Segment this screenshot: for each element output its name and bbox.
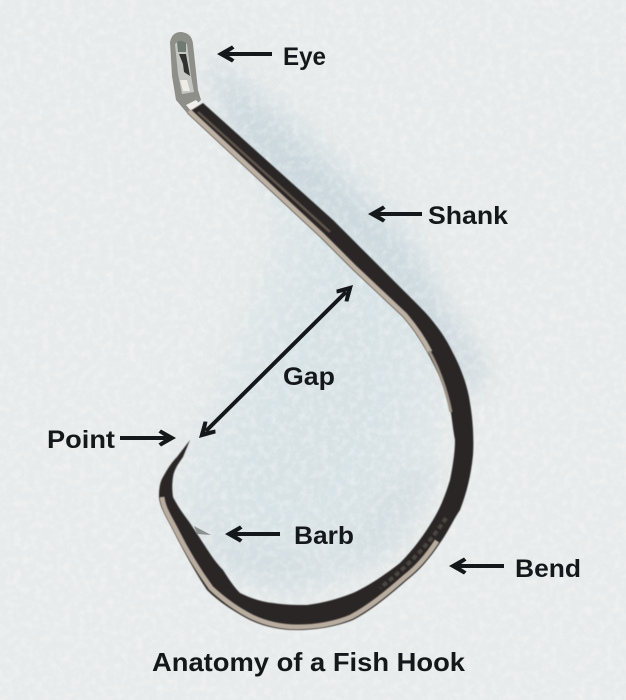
label: Point: Point bbox=[47, 426, 116, 454]
label: Gap bbox=[193, 279, 359, 444]
label: Eye: Eye bbox=[283, 43, 326, 71]
label: Point bbox=[47, 426, 176, 454]
label: Barb: Barb bbox=[294, 522, 354, 550]
hook: silver rim along shank bbox=[189, 111, 430, 352]
title: Anatomy of a Fish Hook bbox=[152, 647, 466, 677]
fish hook bbox=[159, 32, 473, 630]
label: Bend: Bend bbox=[515, 555, 581, 583]
label: Shank: Shank bbox=[428, 202, 508, 230]
label: Shank bbox=[368, 202, 508, 230]
hook: tan band on shank bbox=[198, 112, 330, 232]
label: Barb bbox=[225, 522, 354, 550]
label: Gap: Gap bbox=[283, 363, 335, 391]
hook: eye bbox=[170, 32, 202, 113]
label: Bend bbox=[449, 555, 581, 583]
hook: bend speckle bbox=[380, 518, 446, 588]
hook: barb bbox=[194, 526, 211, 535]
hook: dark shank, bend and point body bbox=[159, 103, 473, 630]
label: Eye bbox=[217, 43, 326, 71]
hook: thin silver rim at inside of curve bbox=[429, 351, 451, 412]
hook: silver rim along bend bbox=[162, 497, 437, 627]
